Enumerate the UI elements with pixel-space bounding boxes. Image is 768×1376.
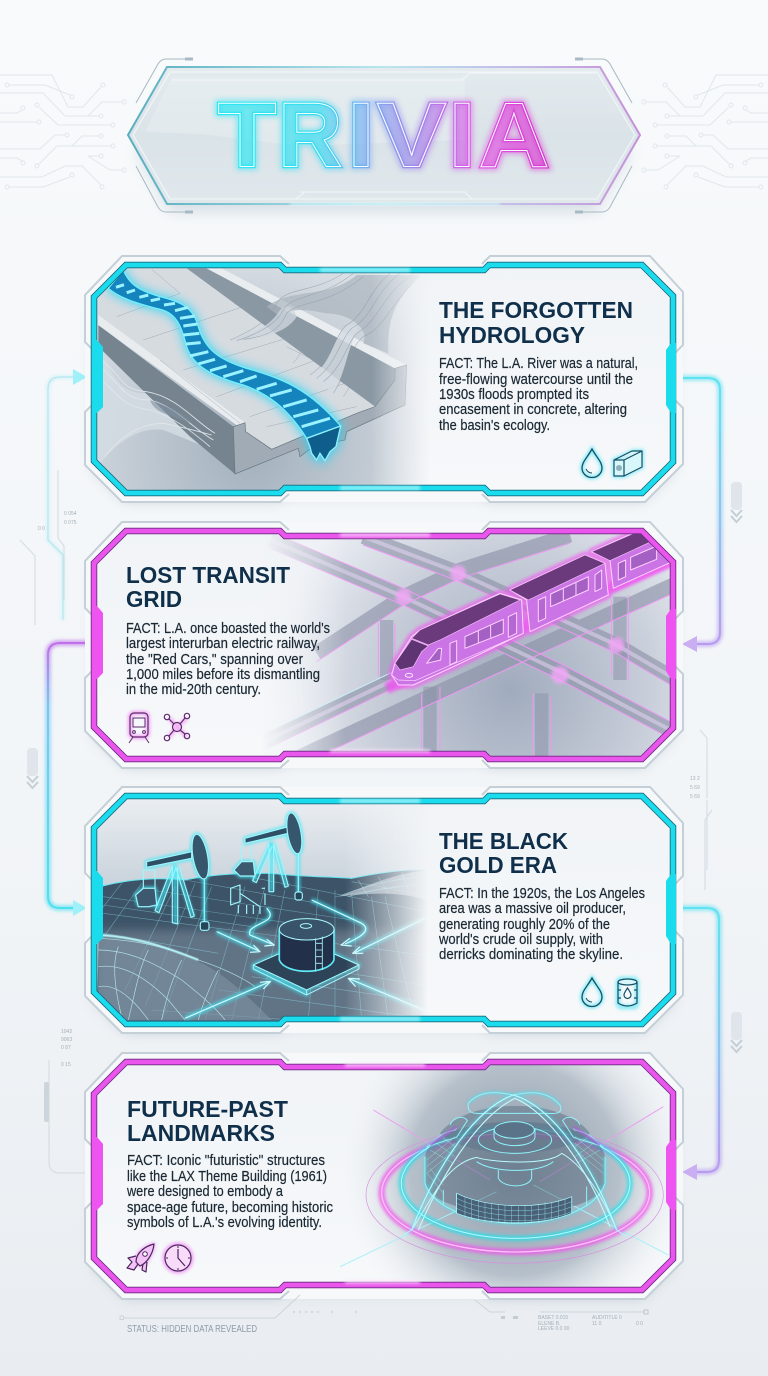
fact text: 1,000 miles before its dismantling: [126, 666, 320, 683]
title text: V: [376, 84, 446, 186]
illustration: oil derricks and storage tank: [97, 803, 424, 1021]
small data labels: 5 69: [690, 785, 700, 791]
fact text: area was a massive oil producer,: [439, 900, 626, 917]
side decoration traces: [20, 470, 712, 1173]
status text: STATUS: HIDDEN DATA REVEALED: [127, 1323, 257, 1335]
title text: I: [448, 84, 476, 186]
icon: oil drop: [582, 978, 602, 1007]
footer data block right: 11 0: [592, 1321, 602, 1327]
card 1: the forgotten hydrology: [85, 256, 683, 502]
title text: I: [348, 84, 374, 186]
title text: R: [278, 84, 342, 186]
title text: I: [348, 84, 374, 186]
icon: oil barrel: [618, 979, 637, 1007]
fact text: [126, 1152, 333, 1231]
storage tank: [253, 919, 359, 995]
arches: [412, 1095, 617, 1230]
icon: water drop: [582, 449, 602, 478]
heading: [126, 562, 290, 612]
fact text: generating roughly 20% of the: [439, 916, 610, 933]
fact text: largest interurban electric railway,: [126, 635, 320, 652]
heading: GOLD ERA: [439, 852, 557, 878]
heading: LANDMARKS: [127, 1120, 275, 1146]
illustration: concrete channel and glowing river: [97, 268, 420, 490]
heading: FUTURE-PAST: [127, 1096, 288, 1122]
small data labels: 0 0: [38, 526, 45, 532]
river body: [108, 270, 341, 438]
building body: [425, 1122, 605, 1213]
banner hexagon: [128, 67, 640, 204]
small data labels: 9063: [61, 1037, 72, 1043]
fact text: in the mid-20th century.: [126, 681, 261, 698]
small data labels: 0 054: [64, 511, 77, 517]
title text: I: [448, 84, 476, 186]
chevron capsule left: [27, 748, 38, 788]
heading: [439, 828, 568, 878]
fact text: like the LAX Theme Building (1961): [127, 1168, 327, 1185]
card 2: lost transit grid: [85, 517, 683, 768]
heading: [439, 297, 633, 348]
chevron capsule right top: [731, 482, 742, 522]
icon: network nodes: [164, 713, 190, 741]
fact text: FACT: Iconic "futuristic" structures: [127, 1152, 325, 1169]
title text: [218, 84, 550, 186]
connector: card 2 to card 3: [48, 643, 93, 916]
heading: THE FORGOTTEN: [439, 297, 633, 323]
connector: arrow into card 1: [48, 369, 87, 620]
heading: [127, 1096, 288, 1146]
fact text: [439, 355, 638, 434]
fact text: the basin's ecology.: [439, 417, 550, 434]
terrain grid: [98, 877, 435, 1020]
title text: V: [376, 84, 446, 186]
heading: LOST TRANSIT: [126, 562, 290, 588]
arrows: [185, 900, 432, 1018]
illustration: elevated train and rail grid: [269, 534, 670, 756]
chevron capsule right bottom: [731, 1012, 742, 1052]
footer data block right: 0 0: [636, 1321, 643, 1327]
facade mesh: [457, 1193, 572, 1223]
title text: V: [376, 84, 446, 186]
side capsule bar: [44, 1082, 49, 1122]
connector: card 1 to card 2: [676, 378, 720, 652]
connector: card 3 to card 4: [676, 908, 719, 1180]
train: [392, 517, 683, 685]
fact text: FACT: In the 1920s, the Los Angeles: [439, 885, 645, 902]
fact text: encasement in concrete, altering: [439, 401, 627, 418]
fact text: derricks dominating the skyline.: [439, 946, 623, 963]
footer data block right: [475, 1300, 648, 1332]
footer data block right: BASET 0.015: [538, 1315, 568, 1321]
small data labels: 0 15: [61, 1062, 71, 1068]
illustration: LAX theme building: [340, 1065, 668, 1287]
river glow: [108, 270, 341, 461]
title text: R: [278, 84, 342, 186]
heading: THE BLACK: [439, 828, 568, 854]
title text: T: [218, 84, 276, 186]
card 4: future-past landmarks: [85, 1053, 683, 1299]
fact text: FACT: The L.A. River was a natural,: [439, 355, 638, 372]
small data labels: 1042: [61, 1029, 72, 1035]
circuit traces right: [642, 75, 768, 189]
circuit traces left: [0, 75, 126, 189]
fact text: symbols of L.A.'s evolving identity.: [127, 1214, 322, 1231]
heading: HYDROLOGY: [439, 322, 585, 348]
heading: GRID: [126, 586, 182, 612]
small data labels: [38, 511, 700, 1068]
pump jacks: [136, 812, 304, 923]
title text: A: [478, 84, 550, 186]
fact text: the "Red Cars," spanning over: [126, 651, 303, 668]
title text: T: [218, 84, 276, 186]
small data labels: 13 2: [690, 776, 700, 782]
fact text: [438, 885, 645, 963]
icon: concrete cube: [614, 451, 642, 476]
small data labels: 0 075: [64, 520, 77, 526]
footer dots: [293, 1311, 357, 1313]
footer data block right: AUDITITLE 0: [592, 1315, 622, 1321]
title text: T: [218, 84, 276, 186]
fact text: world's crude oil supply, with: [438, 931, 603, 948]
footer data block right: ELENE B.: [538, 1321, 561, 1327]
small data labels: 5 69: [690, 794, 700, 800]
fact text: FACT: L.A. once boasted the world's: [126, 620, 330, 637]
banner brackets: [136, 59, 632, 212]
fact text: [126, 620, 330, 698]
title text: A: [478, 84, 550, 186]
title text: I: [348, 84, 374, 186]
title banner: [128, 59, 640, 212]
fact text: free-flowing watercourse until the: [439, 371, 633, 388]
icon: train: [129, 713, 149, 743]
title text: I: [448, 84, 476, 186]
icon: rocket: [127, 1244, 154, 1272]
small data labels: 0 87: [61, 1045, 71, 1051]
footer trace left: [120, 1295, 300, 1320]
footer data block right: LEEVE 0.0 00: [538, 1326, 570, 1332]
fact text: were designed to embody a: [126, 1183, 284, 1200]
fact text: 1930s floods prompted its: [439, 386, 589, 403]
title text: R: [278, 84, 342, 186]
fact text: space-age future, becoming historic: [127, 1199, 333, 1216]
icon: clock: [165, 1245, 191, 1271]
card 3: the black gold era: [85, 787, 683, 1033]
title text: A: [478, 84, 550, 186]
